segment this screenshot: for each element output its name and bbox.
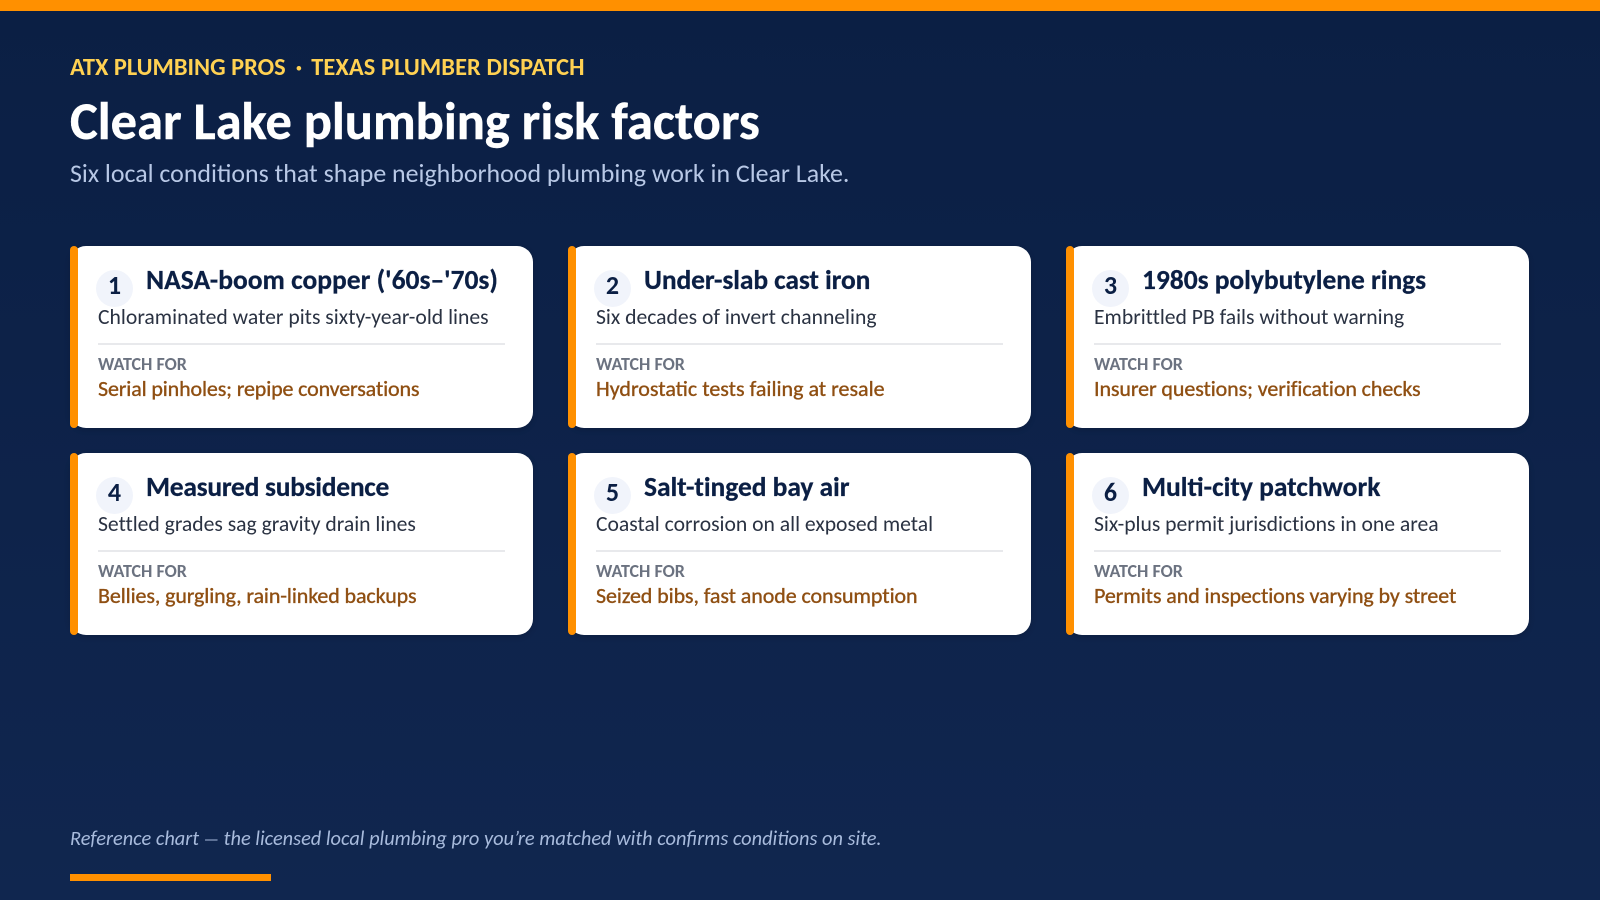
card 3 watch text: Insurer questions; verification checks <box>1094 375 1421 402</box>
eyebrow: ATX PLUMBING PROS · TEXAS PLUMBER DISPATCH <box>70 52 585 82</box>
card 6 description: Six-plus permit jurisdictions in one area <box>1094 510 1439 537</box>
card 5 description: Coastal corrosion on all exposed metal <box>596 510 933 537</box>
panel: card 3 <box>1066 246 1529 428</box>
card 3 heading: 1980s polybutylene rings <box>1142 264 1426 297</box>
card 4 heading: Measured subsidence <box>146 471 389 504</box>
card 2 watch text: Hydrostatic tests failing at resale <box>596 375 885 402</box>
card 4 watch label: WATCH FOR <box>98 560 187 582</box>
card 5 watch text: Seized bibs, fast anode consumption <box>596 582 918 609</box>
card 2 watch label: WATCH FOR <box>596 353 685 375</box>
panel: card 1 <box>70 246 533 428</box>
card 6 watch label: WATCH FOR <box>1094 560 1183 582</box>
number badge 6: 6 <box>1104 476 1117 508</box>
card 6 watch text: Permits and inspections varying by street <box>1094 582 1456 609</box>
panel: card 5 <box>568 453 1031 635</box>
number badge 5: 5 <box>606 476 619 508</box>
title: Clear Lake plumbing risk factors <box>70 90 760 154</box>
subtitle: Six local conditions that shape neighborhood plumbing work in Clear Lake. <box>70 157 849 189</box>
card 3 description: Embrittled PB fails without warning <box>1094 303 1404 330</box>
footnote: Reference chart — the licensed local plumbing pro you’re matched with confirms conditions on site. <box>70 827 882 851</box>
panel: card 4 <box>70 453 533 635</box>
card 1 heading: NASA-boom copper ('60s–'70s) <box>146 264 498 297</box>
number badge 2: 2 <box>606 269 619 301</box>
card 4 description: Settled grades sag gravity drain lines <box>98 510 416 537</box>
card 5 heading: Salt-tinged bay air <box>644 471 849 504</box>
panel: card 6 <box>1066 453 1529 635</box>
card 3 watch label: WATCH FOR <box>1094 353 1183 375</box>
card 6 heading: Multi-city patchwork <box>1142 471 1380 504</box>
number badge 1: 1 <box>108 269 121 301</box>
panel: card 2 <box>568 246 1031 428</box>
card 1 watch label: WATCH FOR <box>98 353 187 375</box>
top accent bar <box>0 0 1600 11</box>
bottom accent bar <box>70 874 271 881</box>
number badge 3: 3 <box>1104 269 1117 301</box>
card 2 description: Six decades of invert channeling <box>596 303 876 330</box>
card 1 description: Chloraminated water pits sixty-year-old lines <box>98 303 489 330</box>
card 2 heading: Under-slab cast iron <box>644 264 870 297</box>
number badge 4: 4 <box>108 476 121 508</box>
card 5 watch label: WATCH FOR <box>596 560 685 582</box>
card 4 watch text: Bellies, gurgling, rain-linked backups <box>98 582 417 609</box>
card 1 watch text: Serial pinholes; repipe conversations <box>98 375 419 402</box>
